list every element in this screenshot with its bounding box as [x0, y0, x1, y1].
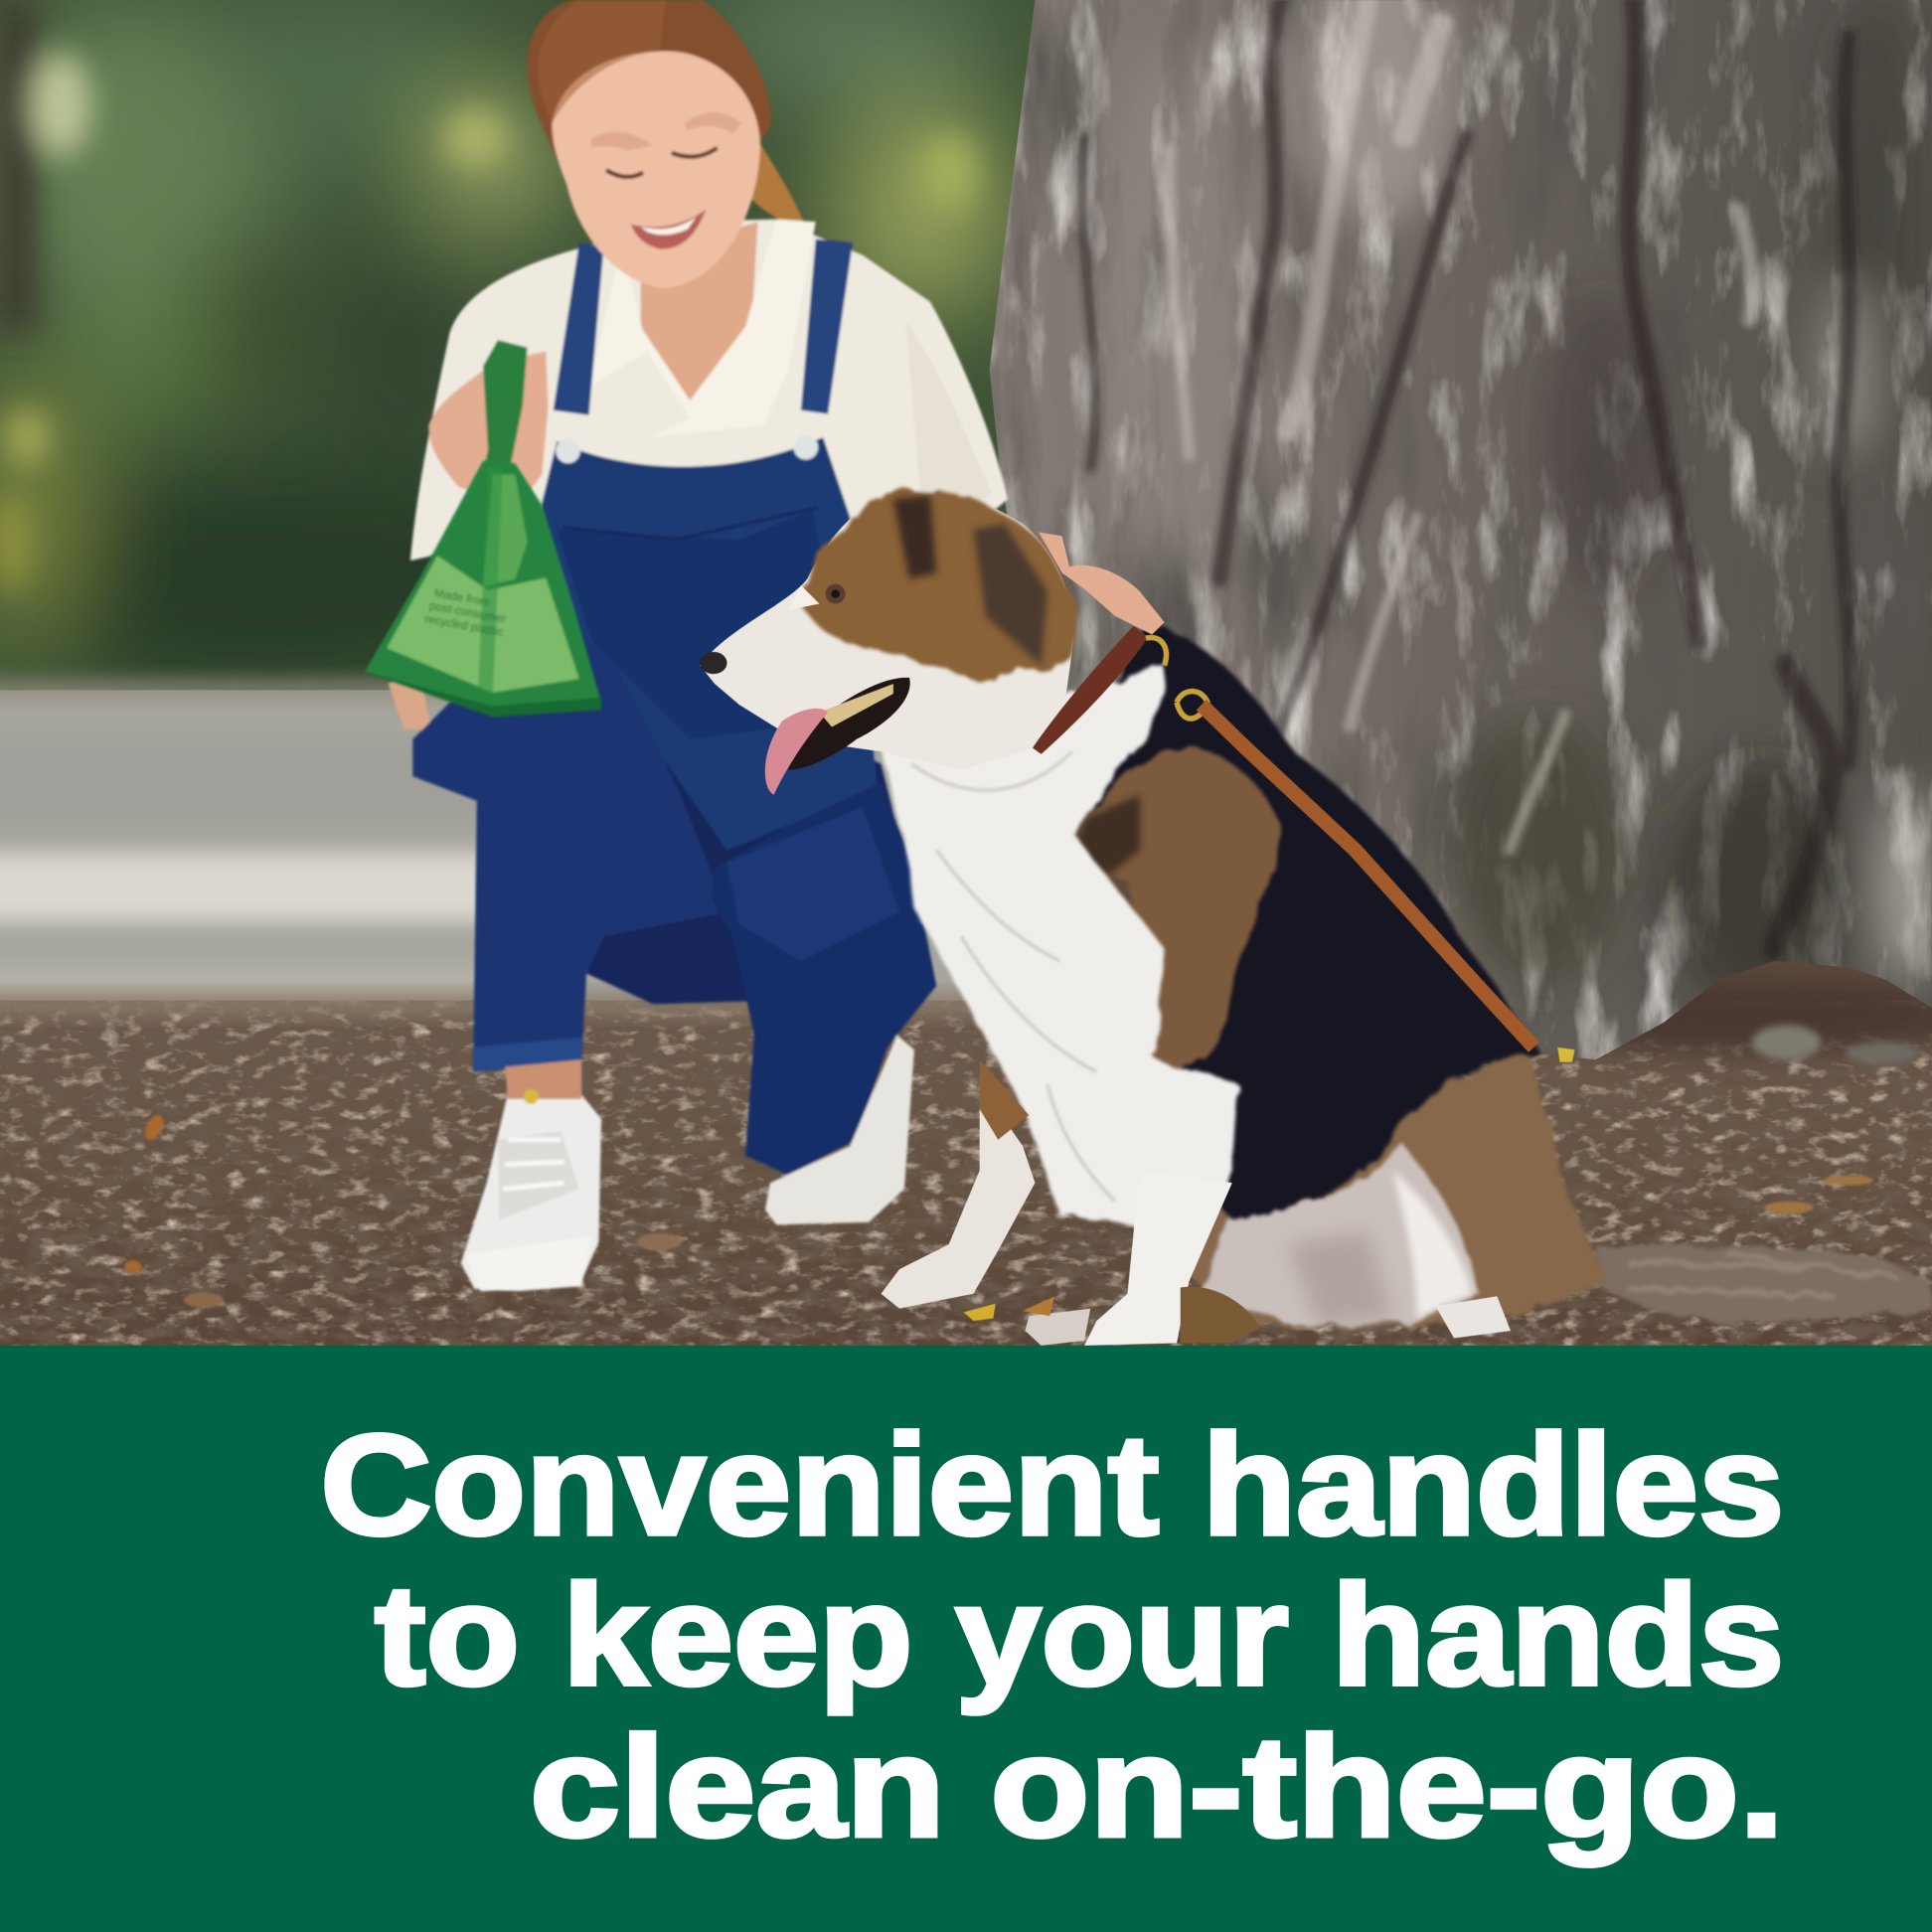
overall bib	[536, 437, 878, 850]
rear arm	[389, 665, 431, 729]
headline text	[320, 1406, 1784, 1866]
near knee	[711, 782, 936, 1176]
woman	[389, 0, 1008, 1291]
dog front leg	[1084, 1171, 1232, 1346]
collar	[594, 217, 817, 403]
dark denim under the bib	[584, 754, 937, 1006]
blurred forest background	[0, 0, 1059, 703]
shoes	[461, 1084, 601, 1291]
tree trunk	[973, 0, 1932, 1084]
green caption band	[0, 1346, 1932, 1932]
bag printed text: recycled plastic	[423, 612, 505, 639]
headline text: clean on-the-go.	[530, 1707, 1784, 1866]
headline text: to keep your hands	[375, 1556, 1784, 1715]
ankle	[505, 1059, 581, 1099]
bag printed text: post-consumer	[428, 599, 507, 626]
leather leash	[1202, 705, 1534, 1047]
headline text: Convenient handles	[320, 1406, 1784, 1565]
ponytail	[750, 143, 804, 223]
dog hind body and rear fur	[1183, 1047, 1608, 1328]
neck	[641, 222, 757, 401]
dog black back	[1084, 622, 1540, 1219]
dog head	[700, 489, 1076, 795]
overall buckles	[556, 438, 580, 463]
blurred path	[0, 682, 1059, 1013]
woman fingers on dog	[1039, 533, 1165, 634]
bag printed text: Made from	[433, 586, 491, 609]
hand and bag handle	[428, 351, 549, 508]
dog	[700, 489, 1932, 1346]
overall straps	[554, 242, 604, 415]
dog white chest	[878, 665, 1238, 1232]
photo: woman and dog in a park	[0, 0, 1932, 1348]
face and hair	[527, 0, 771, 288]
far leg	[412, 610, 726, 1072]
white shirt	[410, 220, 1008, 579]
leather collar	[1033, 626, 1148, 754]
mulch ground	[0, 977, 1932, 1348]
tail	[1596, 1246, 1932, 1322]
dog rear far leg and paw	[881, 1084, 1035, 1309]
green waste bag with handles	[365, 461, 601, 718]
dog brown flank	[1072, 749, 1281, 1064]
brass clip	[1146, 638, 1208, 719]
